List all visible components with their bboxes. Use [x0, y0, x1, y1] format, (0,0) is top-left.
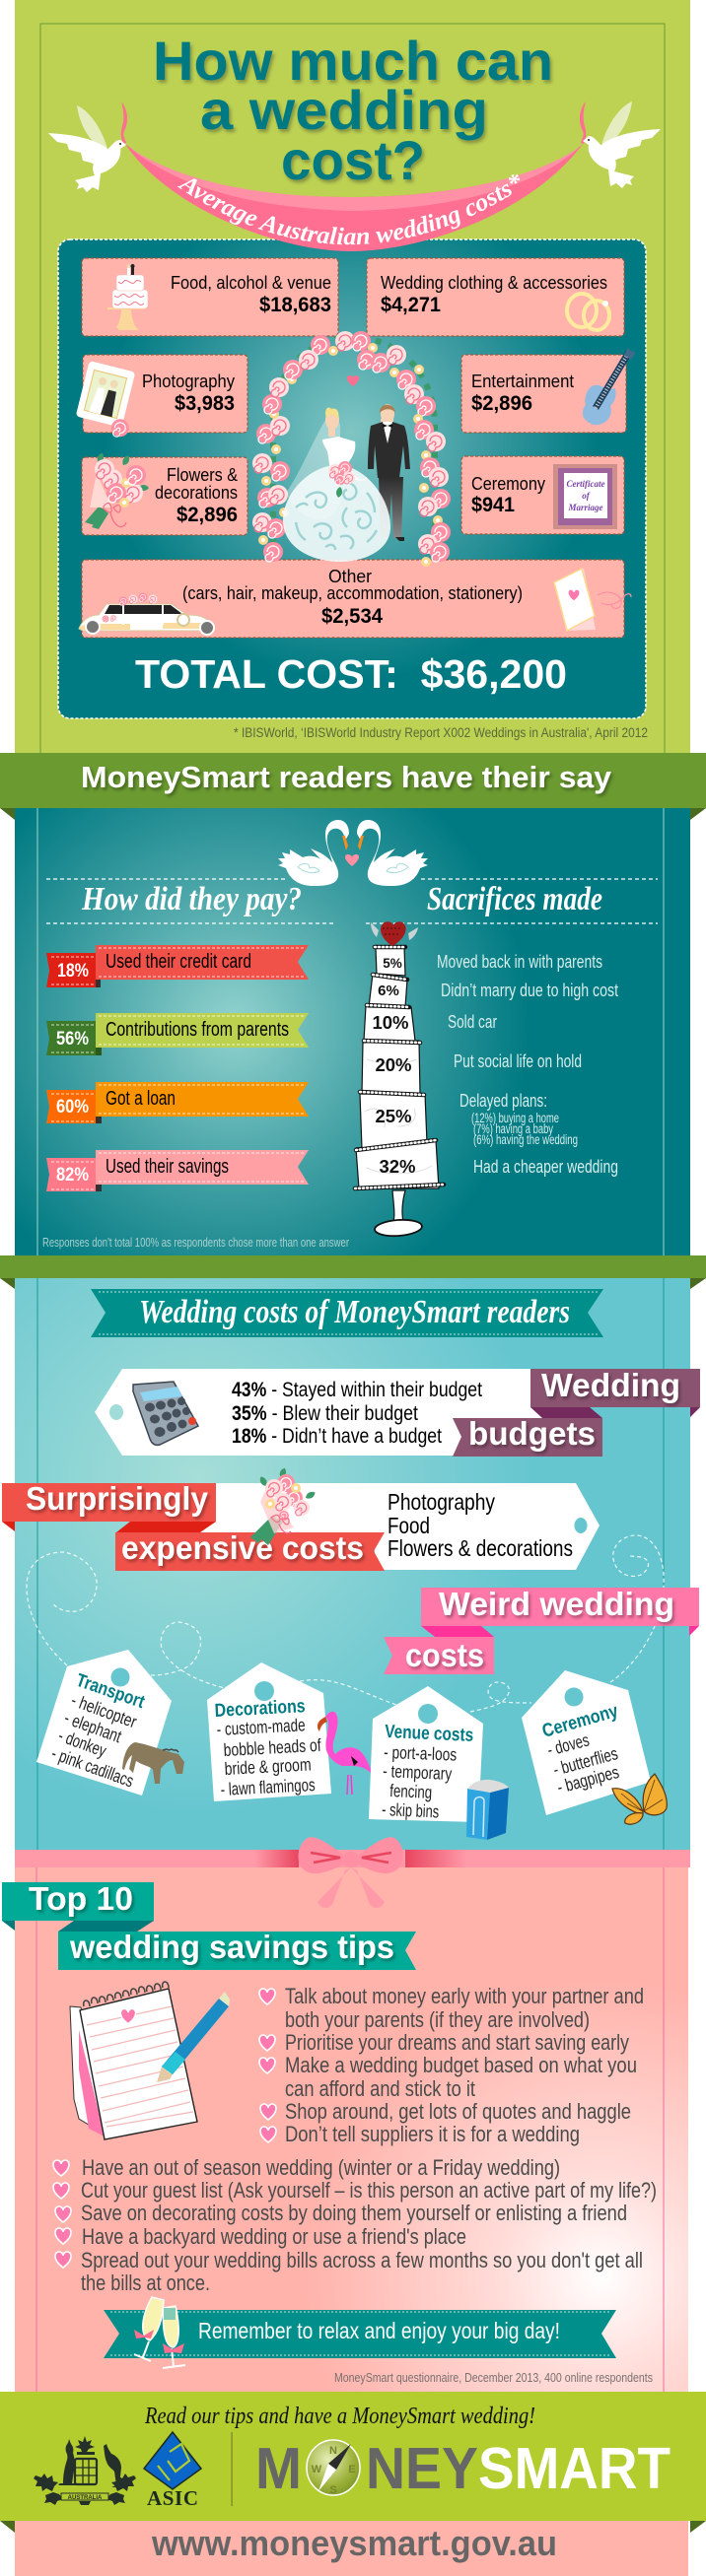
card: food: $18,683 — [259, 294, 331, 316]
decorative inner border — [40, 24, 665, 773]
heading: how did they pay: How did they pay? — [81, 881, 302, 917]
ribbon: savings 82%: Used their savings — [106, 1156, 229, 1178]
section: savings tips background — [15, 1867, 688, 2392]
icon: certificate: Certificate — [566, 479, 605, 489]
section: readers background — [15, 808, 690, 1255]
budget stats: 43% - Stayed within their budget — [232, 1379, 482, 1401]
ribbon band with bow — [15, 1837, 690, 1908]
tag: wedding budgets — [95, 1367, 700, 1457]
card: other: (cars, hair, makeup, accommodation, stationery) — [182, 583, 523, 603]
ribbon: parents 56%: 56% — [56, 1029, 89, 1050]
ribbon: savings 82%: 82% — [56, 1165, 89, 1186]
tag: transport — [36, 1650, 172, 1796]
card: entertainment — [461, 355, 626, 433]
tips list: both your parents (if they are involved) — [285, 2007, 590, 2032]
icon: left dove — [48, 105, 126, 192]
tag: ceremony: - doves — [545, 1729, 592, 1760]
ribbon: budgets: budgets — [468, 1415, 596, 1452]
logo: MoneySmart — [255, 2436, 671, 2501]
swag banner — [121, 102, 586, 251]
card: photography — [83, 355, 247, 433]
heading: sacrifices made: Sacrifices made — [427, 881, 602, 917]
card: other: $2,534 — [321, 605, 383, 628]
ribbon: expensive costs: expensive costs — [121, 1529, 364, 1566]
tag: surprisingly expensive costs — [2, 1467, 600, 1571]
tag: transport: - pink cadillacs — [49, 1743, 136, 1792]
tag: transport: - elephant — [62, 1708, 124, 1746]
card: flowers — [82, 457, 247, 535]
logo: MoneySmart: NEY — [366, 2436, 478, 2501]
tag: decorations: - lawn flamingos — [220, 1775, 316, 1799]
tag: ceremony — [522, 1670, 651, 1815]
card: flowers: decorations — [155, 483, 238, 503]
card: flowers: $2,896 — [176, 504, 238, 526]
card: clothing — [367, 258, 624, 336]
card: entertainment: $2,896 — [471, 392, 532, 415]
cake labels: 5% — [383, 956, 402, 971]
title: cost? — [281, 129, 425, 191]
logo: commonwealth coat of arms: AUSTRALIA — [68, 2495, 103, 2501]
ribbon: credit card 18%: 18% — [57, 961, 89, 982]
logo: commonwealth coat of arms — [34, 2436, 136, 2505]
ribbon: Top 10 — [2, 1880, 154, 1932]
tag: decorations: - custom-made — [216, 1715, 306, 1739]
card: ceremony: $941 — [471, 494, 515, 516]
band divider — [0, 1255, 706, 1289]
sacrifice labels: Delayed plans: — [459, 1091, 547, 1111]
sacrifice labels — [437, 952, 618, 1177]
ribbon: costs: costs — [405, 1637, 484, 1673]
card: food — [82, 258, 338, 336]
icon: swans — [278, 820, 428, 886]
ribbon: credit card 18%: Used their credit card — [106, 951, 251, 973]
ribbon: Weird wedding: Weird wedding — [439, 1586, 674, 1622]
cake labels: 20% — [375, 1054, 412, 1075]
icon: flamingo — [318, 1712, 372, 1795]
sacrifice labels: Had a cheaper wedding — [473, 1157, 618, 1177]
tips list: can afford and stick to it — [285, 2076, 476, 2101]
ribbon heading: wedding costs of MoneySmart readers: Wedding costs of MoneySmart readers — [139, 1294, 570, 1330]
ribbon: credit card 18% — [46, 945, 309, 987]
budget stats: 18% - Didn’t have a budget — [232, 1425, 442, 1448]
tips list: Prioritise your dreams and start saving early — [285, 2030, 630, 2055]
ribbon heading: wedding costs of MoneySmart readers — [91, 1289, 603, 1337]
total cost: TOTAL COST: $36,200 — [135, 651, 567, 697]
ribbon: remember to relax — [104, 2310, 616, 2358]
tips list: Have a backyard wedding or use a friend's place — [82, 2224, 466, 2249]
icon: floral arch — [252, 331, 451, 567]
ribbon: Wedding — [530, 1367, 700, 1418]
illustration: groom — [368, 404, 410, 541]
sacrifice labels: Put social life on hold — [454, 1051, 582, 1071]
cake tiers — [356, 948, 439, 1188]
ribbon: loan 60% — [46, 1082, 309, 1123]
tag: venue costs: Venue costs — [385, 1722, 474, 1746]
cake trim — [355, 947, 444, 1188]
tips list: the bills at once. — [81, 2271, 210, 2295]
tips list — [53, 1984, 657, 2295]
tag: decorations — [207, 1662, 331, 1801]
icon: certificate — [553, 464, 617, 529]
ribbon: loan 60%: 60% — [56, 1097, 89, 1118]
tag: transport: Transport — [73, 1670, 148, 1713]
sacrifice labels: (6%) having the wedding — [473, 1132, 578, 1147]
tag: transport: - donkey — [56, 1726, 108, 1761]
icon: compass: E — [348, 2464, 356, 2475]
icon: right dove — [583, 102, 661, 188]
icon: bow — [298, 1837, 403, 1908]
card: flowers: Flowers & — [167, 465, 238, 485]
chart: tiered cake of sacrifices — [355, 921, 444, 1238]
ribbon: wedding savings tips: wedding savings tips — [69, 1929, 394, 1965]
card: clothing: $4,271 — [381, 294, 441, 316]
ribbon: Wedding: Wedding — [541, 1367, 680, 1403]
tips list: Make a wedding budget based on what you — [285, 2053, 637, 2077]
icon: bouquet — [250, 1467, 317, 1545]
tips list: Have an out of season wedding (winter or a Friday wedding) — [82, 2155, 560, 2180]
bottom url panel: www.moneysmart.gov.au — [151, 2523, 557, 2563]
dashed swirl strings — [27, 1535, 664, 1712]
logo: MoneySmart: SMART — [478, 2436, 671, 2501]
call to action: Read our tips and have a MoneySmart wedding! — [144, 2404, 535, 2429]
sacrifice labels: (7%) having a baby — [473, 1121, 553, 1136]
card: photography: $3,983 — [175, 392, 235, 415]
cake labels: 6% — [378, 983, 399, 999]
panel: cost breakdown — [58, 239, 646, 718]
tag: transport: - helicopter — [69, 1690, 139, 1731]
cake topper: rose heart — [371, 921, 418, 946]
ribbon: parents 56% — [46, 1013, 309, 1055]
cake stand — [375, 1190, 422, 1238]
ribbon: parents 56%: Contributions from parents — [106, 1019, 289, 1041]
logo: ASIC — [144, 2432, 201, 2510]
card: other: Other — [328, 567, 372, 586]
ribbon: remember to relax: Remember to relax and enjoy your big day! — [198, 2318, 560, 2343]
ribbon: loan 60%: Got a loan — [106, 1088, 176, 1110]
tips list: Shop around, get lots of quotes and haggle — [285, 2099, 631, 2124]
icon: portable toilet — [466, 1780, 509, 1840]
card: ceremony — [461, 456, 624, 534]
cake labels: 32% — [379, 1156, 416, 1177]
cake labels: 25% — [375, 1106, 412, 1126]
icon: wedding card — [554, 569, 631, 631]
icon: limousine — [79, 593, 214, 635]
card: food: Food, alcohol & venue — [171, 273, 331, 293]
card: photography: Photography — [142, 372, 235, 391]
tag: ceremony: Ceremony — [540, 1701, 621, 1742]
card: clothing: Wedding clothing & accessories — [381, 273, 607, 293]
icon: calculator — [133, 1382, 198, 1445]
ribbon: Top 10: Top 10 — [29, 1880, 133, 1917]
icon: donkey — [122, 1742, 184, 1784]
logo: MoneySmart: M — [255, 2436, 302, 2501]
icon: compass: S — [329, 2484, 337, 2496]
title — [153, 30, 553, 191]
expensive list: Photography — [388, 1489, 495, 1515]
bottom url panel — [0, 2521, 706, 2576]
tag: venue costs: fencing — [389, 1781, 433, 1802]
tag: decorations: bobble heads of — [223, 1735, 322, 1760]
note: responses: Responses don't total 100% as respondents chose more than one answer — [42, 1235, 349, 1250]
icon: champagne flutes — [134, 2297, 185, 2368]
heading band: MoneySmart readers have their say: MoneySmart readers have their say — [81, 760, 612, 794]
divider — [231, 2432, 233, 2506]
logo: ASIC: ASIC — [147, 2486, 198, 2510]
sacrifice labels: Didn’t marry due to high cost — [441, 981, 618, 1000]
title: How much can — [153, 30, 553, 92]
tip bullets — [53, 1989, 276, 2268]
section: wedding costs background — [15, 1278, 690, 1850]
icon: compass: N — [329, 2445, 337, 2457]
icon: wedding cake — [107, 264, 148, 330]
footer band — [0, 2392, 706, 2521]
tag: ceremony: - butterflies — [551, 1743, 620, 1780]
expensive list: Flowers & decorations — [388, 1535, 573, 1561]
icon: butterfly — [612, 1774, 667, 1824]
icon: certificate: of — [582, 491, 591, 501]
ribbon: savings 82% — [46, 1150, 309, 1191]
banner text: Average Australian wedding costs* — [177, 173, 520, 244]
tag: ceremony: - bagpipes — [555, 1762, 621, 1797]
expensive list — [388, 1489, 573, 1561]
icon: bouquet — [85, 419, 149, 529]
ribbon: Surprisingly: Surprisingly — [26, 1480, 209, 1517]
sacrifice labels: (12%) buying a home — [471, 1111, 559, 1125]
icon: compass: W — [312, 2464, 322, 2475]
budget stats: 35% - Blew their budget — [232, 1402, 418, 1425]
icon: compass — [307, 2440, 360, 2496]
icon: framed photo — [76, 361, 135, 428]
tips list: Don’t tell suppliers it is for a wedding — [285, 2122, 580, 2146]
tag: venue costs: - port-a-loos — [384, 1742, 458, 1765]
sacrifice labels: Sold car — [448, 1012, 497, 1032]
card: other — [82, 560, 624, 638]
icon: certificate: Marriage — [567, 503, 603, 512]
icon: rings — [567, 294, 609, 330]
sacrifice labels: Moved back in with parents — [437, 952, 602, 972]
pencil — [157, 1992, 230, 2082]
tag: venue costs — [369, 1686, 483, 1822]
title: a wedding — [200, 79, 488, 141]
heading band: MoneySmart readers have their say — [0, 753, 706, 820]
card: entertainment: Entertainment — [471, 372, 574, 391]
ribbon: Surprisingly — [2, 1480, 216, 1532]
ribbon: Weird wedding — [421, 1586, 699, 1637]
budget stats — [232, 1379, 482, 1448]
expensive list: Food — [388, 1513, 430, 1538]
tag: decorations: bride & groom — [224, 1754, 312, 1779]
cake labels — [372, 956, 416, 1177]
cake labels: 10% — [372, 1012, 409, 1033]
footnote: * IBISWorld, ‘IBISWorld Industry Report X002 Weddings in Australia', April 2012 — [234, 725, 648, 740]
illustration: bride — [283, 407, 390, 562]
card: ceremony: Ceremony — [471, 474, 545, 494]
tag: decorations: Decorations — [214, 1696, 306, 1722]
tag: venue costs: - temporary — [383, 1761, 453, 1784]
section: average wedding costs background — [15, 0, 690, 755]
icon: notepad and pencil — [70, 1982, 230, 2139]
icon: guitar — [583, 349, 635, 425]
tag: venue costs: - skip bins — [382, 1799, 440, 1822]
